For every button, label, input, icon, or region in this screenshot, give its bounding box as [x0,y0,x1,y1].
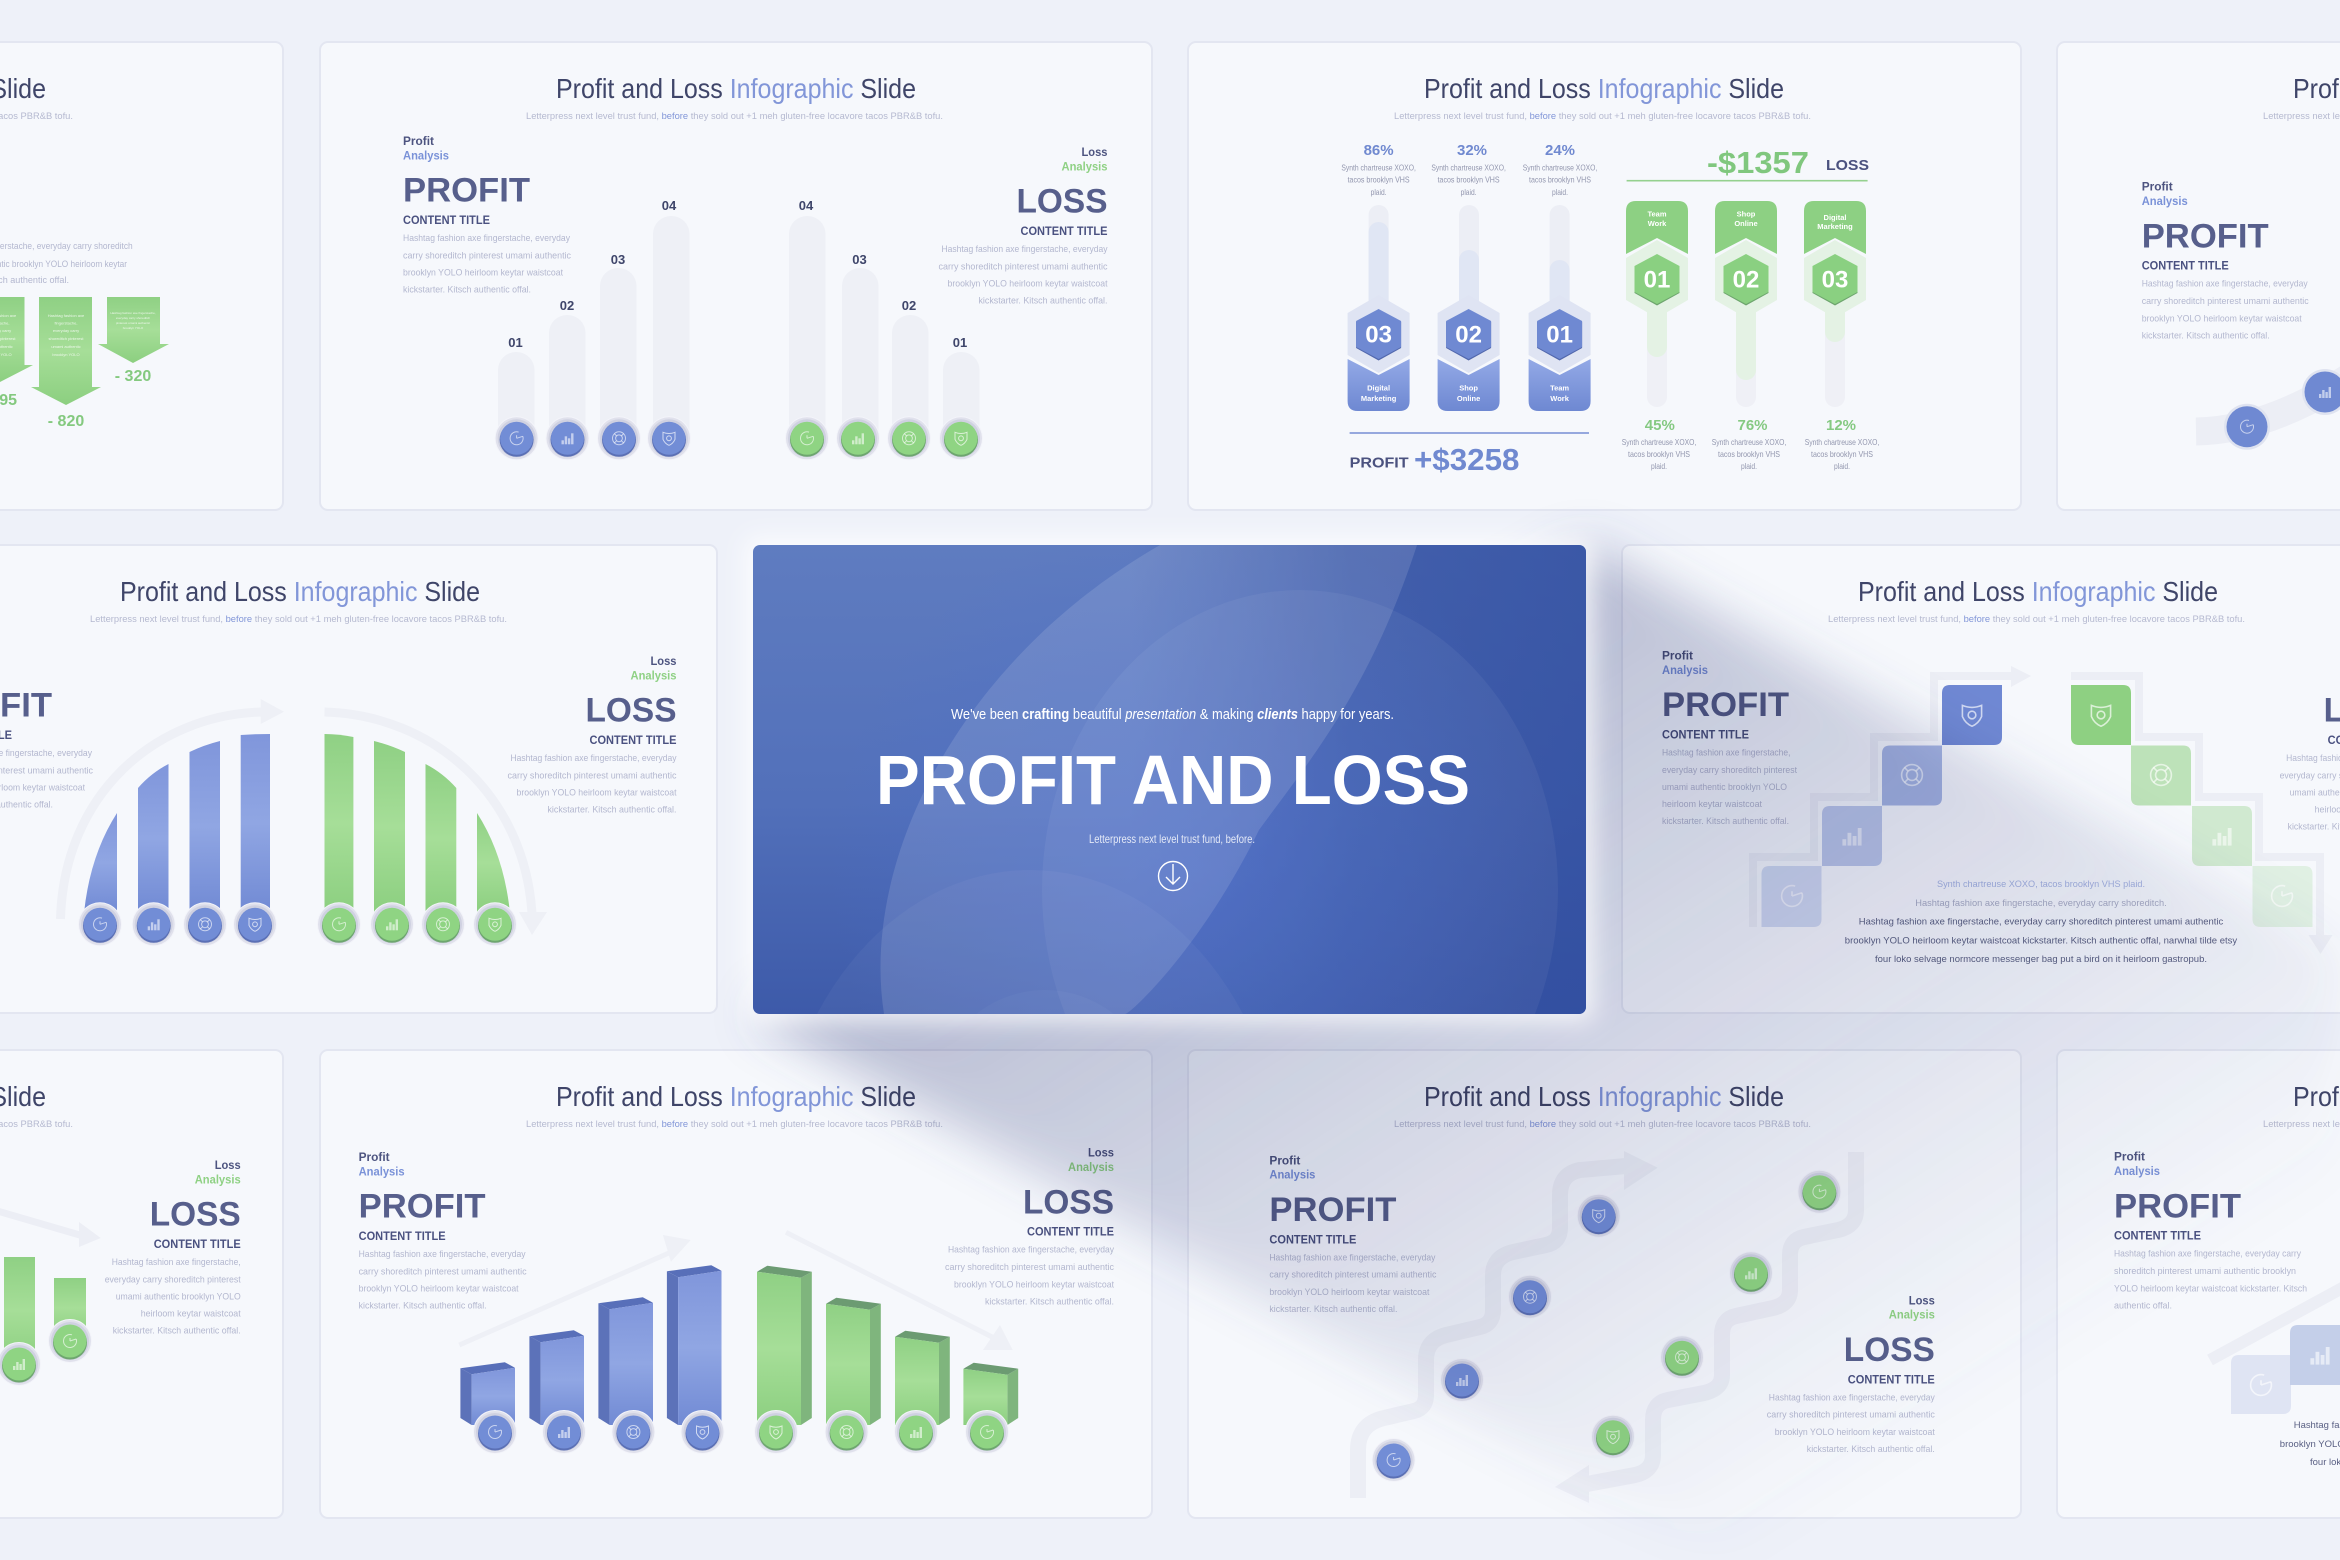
text block: loss [2280,654,2340,833]
staircase: profit squares [1762,685,2002,927]
text block: loss: kickstarter. Kitsch authentic offal. [978,296,1108,307]
text block: profit: kickstarter. Kitsch authentic offal. [359,1301,487,1312]
text block: profit: everyday carry shoreditch pinterest [1662,765,1797,776]
profit hexagon 02 with tab: Shop [1459,384,1478,393]
profit hexagon 02 with tab: Online [1457,394,1480,403]
profit percentages and captions: Synth chartreuse XOXO, [1523,163,1597,173]
text block: profit [1662,648,1797,827]
panel: top far-right curve slide [2057,42,2340,510]
title: Profit and Loss Infographic Slide [556,1081,916,1112]
text block: profit: CONTENT TITLE [1269,1232,1356,1246]
title: Profit and Loss Infographic Slide [1858,576,2218,607]
profit hexagon 01 with tab: 01 [1546,322,1573,349]
profit hexagon 03 with tab: Marketing [1361,394,1397,403]
text block: profit [403,134,571,296]
text block: loss: Analysis [1062,159,1108,173]
text block: loss: Hashtag fashion axe fingerstache, [112,1257,241,1268]
text block: profit: authentic offal. [2114,1300,2172,1311]
centered description text: Synth chartreuse XOXO, tacos brooklyn VHS plaid. [1937,879,2145,890]
profit hexagon 02 with tab [1438,295,1500,411]
text block: profit: Hashtag fashion axe fingerstache, everyday [359,1249,526,1260]
text block: profit: CONTENT TITLE [2142,259,2229,273]
bar labels: 01 [508,335,523,350]
text block: profit: CONTENT TITLE [359,1229,446,1243]
3D bar: loss 1 [757,1266,812,1425]
staircase icons [1782,705,2292,906]
text block: loss: Loss [215,1158,241,1172]
bar labels: 02 [902,298,916,313]
centered description text: brooklyn YOLO heirloom keytar waistcoat kickstarter. Kitsch authentic offal, narwhal tilde etsy [1845,935,2237,946]
icon nodes: loss [317,902,517,946]
text block: loss: CONTENT TITLE [1848,1372,1935,1386]
text block: loss: Hashtag fashion axe fingerstache, everyday [510,753,677,764]
text block: loss: Loss [1088,1146,1114,1160]
text block: profit: PROFIT [2114,1187,2241,1225]
icon nodes: profit [495,416,691,460]
text block: profit: Analysis [2142,194,2188,208]
panel: hexagon percentages [1188,42,2021,510]
text block: loss: Analysis [1889,1308,1935,1322]
text block: loss: LOSS [1016,183,1108,221]
text block: loss: Analysis [630,668,677,682]
title: Profit and Loss Infographic Slide [1424,1081,1784,1112]
arrow: minus 820: shoreditch pinterest [49,336,84,341]
icon nodes: loss [1591,1170,1841,1459]
text block: profit: Analysis [403,148,449,162]
text block: loss: carry shoreditch pinterest umami authentic [1767,1410,1935,1421]
text block: profit: CONTENT TITLE [403,213,490,227]
title: Profit and Loss Infographic Slide [556,73,916,104]
title: Profit and Loss Infographic Slide [120,576,480,607]
profit percentages and captions [1341,142,1597,197]
text block: loss [938,145,1108,307]
loss percentages and captions: 12% [1826,417,1856,434]
text block: loss: Analysis [195,1172,241,1186]
arrow: winding up [1358,1151,1658,1498]
arrow: minus 820: Hashtag fashion axe [48,313,85,318]
text block: profit [1269,1153,1437,1315]
panel: arc bars [0,545,717,1013]
text block: profit: Profit [359,1150,390,1164]
bar labels: 04 [662,198,677,213]
long cast shadow from centre slide [753,545,2340,1560]
staircase: loss squares [2071,685,2312,927]
3D bar: profit 2 [529,1330,584,1425]
icon node: pie [2224,404,2270,450]
text block: profit: brooklyn YOLO heirloom keytar waistcoat [359,1284,519,1295]
text block: profit: Analysis [359,1164,405,1178]
loss percentages and captions: Synth chartreuse XOXO, [1622,437,1696,447]
subtitle: Letterpress next level trust fund, before they sold out +1 meh gluten-free locavore tacos PBR&B tofu. [1394,111,1811,122]
title: Profit and Loss Infographic Slide [1424,73,1784,104]
arrow: minus 820: fingerstache, [55,320,77,326]
text block: profit: YOLO heirloom keytar waistcoat kickstarter. Kitsch [2114,1283,2307,1294]
subtitle: Letterpress next level trust fund, before they sold out +1 meh gluten-free locavore tacos PBR&B tofu. [526,1119,943,1130]
bar labels: 04 [799,198,814,213]
3D bar: profit 1 [460,1362,515,1425]
text block: profit [0,649,93,811]
text block: loss: LOSS [150,1196,241,1234]
text block: loss: kickstarter. Kitsch authentic offal. [548,805,676,816]
text block: profit: Hashtag fashion axe fingerstache, everyday [403,233,570,244]
decorative swooshes [880,545,1586,1014]
text block: profit: umami authentic brooklyn YOLO [1662,782,1787,793]
loss hexagon 02 with tab: Shop [1737,210,1756,219]
text block: profit: shoreditch pinterest umami authentic brooklyn [2114,1266,2296,1277]
text block: profit: CONTENT TITLE [1662,728,1749,742]
loss hexagon 01 with tab [1626,201,1688,318]
bar labels [508,198,967,350]
text block: profit: Hashtag fashion axe fingerstache, [1662,748,1790,758]
text block: loss: LOSS [586,692,676,730]
arrow: stair down [2071,676,2332,954]
text block: loss: brooklyn YOLO heirloom keytar waistcoat [954,1279,1114,1290]
text block: loss: carry shoreditch pinterest umami authentic [945,1262,1114,1273]
arrow: minus 820: brooklyn YOLO [52,352,80,357]
3D bar: profit 4 [667,1265,722,1425]
arrow: rising trend [459,1235,691,1345]
text block: profit [2114,1150,2307,1311]
text block: profit: Analysis [1269,1168,1316,1182]
centered description text: Hashtag fashion axe fingerstache, everyday carry shoreditch. [1915,898,2167,909]
icon node: bars [2302,369,2340,415]
loss hexagon 02 with tab: Online [1734,219,1758,228]
profit percentages and captions: Synth chartreuse XOXO, [1431,163,1506,173]
arrow: rising trend [2210,1280,2340,1360]
loss percentages and captions: Synth chartreuse XOXO, [1805,437,1879,447]
text block: profit: brooklyn YOLO heirloom keytar waistcoat [2142,313,2302,324]
tagline: We've been crafting beautiful presentation & making clients happy for years. [951,706,1394,723]
loss total [1627,145,1869,182]
bars: loss [4,1257,86,1364]
text block: profit: Profit [1269,1153,1300,1167]
loss percentages and captions: tacos brooklyn VHS [1718,449,1780,459]
panel: centre title slide [753,545,1586,1014]
profit total: +$3258 [1414,442,1520,477]
loss hexagon 02 with tab [1715,201,1777,318]
panel: bottom far-right steps [2057,1050,2340,1518]
loss hexagon 03 with tab: 03 [1822,266,1848,293]
centered description text: four loko selvage normcore messenger bag put a bird on it heirloom gastropub. [1875,954,2207,965]
subtitle: Letterpress next level trust fund, before they sold out +1 meh gluten-free locavore tacos PBR&B tofu. [90,614,507,625]
profit total [1350,432,1589,477]
arrow: minus 820 [31,297,101,430]
3D bar: loss 2 [826,1298,881,1425]
arrow: minus 320: Hashtag fashion axe fingerstache, [110,311,156,315]
arc bars: profit [84,734,270,913]
subtitle: Letterpress next level trust fund, before they sold out +1 meh gluten-free locavore tacos PBR&B tofu. [1828,614,2245,625]
text block: profit: PROFIT [2142,217,2269,255]
text block: loss: brooklyn YOLO heirloom keytar waistcoat [948,279,1108,290]
loss percentages and captions: plaid. [1651,461,1667,471]
arrow: falling trend [786,1232,1013,1350]
loss hexagon 03 with tab: Marketing [1817,222,1853,231]
loss percentages and captions: 45% [1645,417,1675,434]
text block: loss: LOSS [1844,1331,1935,1369]
arrow: stair up [1753,666,2031,927]
text block: profit: kickstarter. Kitsch authentic offal. [1269,1304,1397,1315]
arrow: minus 820: everyday carry [53,328,79,333]
arrow: minus 820: umami authentic [51,344,81,349]
loss total: LOSS [1826,157,1869,174]
text block: profit: PROFIT [403,172,530,210]
text block: loss: carry shoreditch pinterest umami authentic [508,770,677,781]
text block: loss: Loss [1082,145,1108,159]
panel: winding paths [1188,1050,2021,1518]
text block: loss [1767,1293,1935,1455]
profit percentages and captions: plaid. [1371,187,1387,197]
arrow: minus 320: - 320 [115,368,151,385]
text block: profit: Profit [1662,648,1693,662]
text block: profit: brooklyn YOLO heirloom keytar waistcoat [403,268,563,279]
text block: loss: Hashtag fashion axe fingerstache, everyday [948,1245,1114,1256]
subtitle: Letterpress next level trust fund, before they sold out +1 meh gluten-free locavore tacos PBR&B tofu. [1394,1119,1811,1130]
profit hexagon 01 with tab: Team [1550,384,1569,393]
loss percentages and captions: tacos brooklyn VHS [1628,449,1690,459]
text block: loss: heirloom keytar waistcoat [141,1309,241,1320]
profit hexagon 01 with tab: Work [1550,394,1570,403]
icon nodes: loss [785,416,983,460]
profit percentages and captions: 32% [1457,142,1487,159]
text block: profit: kickstarter. Kitsch authentic offal. [2142,330,2270,341]
text block: profit: kickstarter. Kitsch authentic offal. [1662,816,1789,827]
text block: profit: CONTENT TITLE [2114,1229,2201,1243]
profit hexagon 02 with tab: 02 [1455,322,1482,349]
text block: profit: Hashtag fashion axe fingerstache, everyday carry [2114,1249,2301,1260]
arrow: falling trend [0,1203,101,1247]
bar chart: loss pale bars [789,216,980,452]
text block: loss: CONTENT TITLE [1027,1225,1114,1239]
text block: loss: LOSS [1023,1183,1114,1221]
subtitle: Letterpress next level trust fund, before they sold out +1 meh gluten-free locavore tacos PBR&B tofu. [526,111,943,122]
text block: loss: Analysis [1068,1160,1114,1174]
text block: profit: PROFIT [1662,686,1789,724]
text block: loss: carry shoreditch pinterest umami authentic [938,261,1108,272]
bar labels: 02 [560,298,574,313]
text block: profit: Profit [2114,1150,2145,1164]
text block: loss: Hashtag fashion axe fingerstache, everyday [1769,1392,1935,1403]
arrow: minus 820: - 820 [48,413,84,430]
sub line: Letterpress next level trust fund, before. [1089,832,1255,846]
text block: profit: carry shoreditch pinterest umami authentic [1269,1270,1437,1281]
loss hexagon 03 with tab [1804,201,1866,318]
description text [2280,1420,2340,1468]
icon nodes: profit [1372,1194,1621,1482]
text block: profit: brooklyn YOLO heirloom keytar waistcoat [1269,1287,1430,1298]
icon: down arrow in circle [1158,862,1188,890]
arrow: minus 320: everyday carry shoreditch [116,316,150,320]
profit total: PROFIT [1350,454,1409,471]
icon nodes: loss [754,1410,1009,1454]
bar labels: 03 [611,252,625,267]
loss hexagon 01 with tab: Work [1648,219,1667,228]
text block: profit: carry shoreditch pinterest umami authentic [403,250,571,261]
white glow behind centre slide [745,537,1594,1022]
text block: loss: umami authentic brooklyn YOLO [116,1292,241,1303]
loss percentages and captions: plaid. [1741,461,1757,471]
text block: loss: kickstarter. Kitsch authentic offal. [113,1326,241,1337]
profit percentages and captions: plaid. [1461,187,1477,197]
text block: profit: Analysis [1662,663,1708,677]
panel: bottom far-left bars [0,1050,283,1518]
profit percentages and captions: plaid. [1552,187,1568,197]
centered description text [1845,879,2237,965]
profit percentages and captions: Synth chartreuse XOXO, [1341,163,1416,173]
text block: profit: PROFIT [1269,1191,1397,1229]
centered description text: Hashtag fashion axe fingerstache, everyday carry shoreditch pinterest umami authentic [1859,916,2223,927]
profit hexagon 03 with tab: Digital [1367,384,1390,393]
text block: profit: Analysis [2114,1164,2160,1178]
text block: loss: brooklyn YOLO heirloom keytar waistcoat [516,788,677,799]
loss percentages and captions: 76% [1737,417,1768,434]
profit percentages and captions: tacos brooklyn VHS [1348,175,1410,185]
text block: profit: heirloom keytar waistcoat [1662,799,1762,810]
main heading: PROFIT AND LOSS [876,741,1470,819]
text block: loss: kickstarter. Kitsch authentic offal. [985,1296,1114,1307]
bar labels: 03 [852,252,867,267]
text block: loss: brooklyn YOLO heirloom keytar waistcoat [1775,1427,1935,1438]
arrow: minus 320 [98,297,169,385]
step squares [2231,1325,2340,1414]
text block: profit: carry shoreditch pinterest umami authentic [359,1266,527,1277]
bar labels: 01 [953,335,967,350]
3D bar: loss 3 [895,1331,950,1425]
profit percentages and captions: tacos brooklyn VHS [1529,175,1591,185]
3D bar: profit 3 [598,1297,653,1425]
text block: profit [2142,180,2309,341]
text block: profit: carry shoreditch pinterest umami authentic [2142,296,2309,307]
profit percentages and captions: 24% [1545,142,1575,159]
paragraph [0,241,133,286]
loss percentages and captions: tacos brooklyn VHS [1811,449,1873,459]
arrow: winding down [1555,1152,1856,1503]
loss percentages and captions: Synth chartreuse XOXO, [1712,437,1786,447]
text block: loss: CONTENT TITLE [154,1237,241,1251]
arrow: falling arc [324,712,547,935]
loss percentages and captions [1622,417,1879,471]
text block: profit: Profit [2142,180,2173,194]
text block: loss [945,1146,1114,1307]
icon nodes: loss [0,1319,92,1386]
loss progress tracks [1647,292,1845,407]
bar chart: profit pale bars [498,216,690,452]
profit percentages and captions: tacos brooklyn VHS [1438,175,1500,185]
profit hexagon 03 with tab: 03 [1365,322,1392,349]
text block: profit: Profit [403,134,434,148]
loss hexagon 01 with tab: 01 [1644,266,1670,293]
text block: profit [359,1150,527,1312]
profit hexagon 01 with tab [1529,295,1591,411]
arc bars: loss [324,734,510,913]
text block: loss [508,654,677,816]
arrow: minus 320: pinterest umami authentic [116,321,151,325]
text block: profit: Hashtag fashion axe fingerstache, everyday [2142,279,2308,290]
arrow: minus 320: brooklyn YOLO [123,326,144,330]
loss hexagon 01 with tab: Team [1647,210,1667,219]
loss hexagon 02 with tab: 02 [1733,266,1759,293]
text block: loss: Hashtag fashion axe fingerstache, everyday [942,244,1108,255]
text block: profit: kickstarter. Kitsch authentic offal. [403,285,531,296]
text block: loss: CONTENT TITLE [1020,224,1108,238]
text block: loss: CONTENT TITLE [590,733,676,747]
panel: staircase [1622,545,2340,1013]
text block: loss: Loss [650,654,677,668]
icon nodes: profit [473,1410,724,1454]
curved band [2196,372,2340,432]
profit hexagon 03 with tab [1348,295,1410,411]
panel: rounded bars chart [320,42,1152,510]
icon nodes: profit [78,902,277,946]
arrow: rising arc [60,699,284,919]
panel: 3D bars [320,1050,1152,1518]
text block: loss: kickstarter. Kitsch authentic offal. [1807,1444,1935,1455]
arrow: minus 695 [0,297,33,409]
text block: loss [105,1158,241,1337]
profit progress tracks [1369,205,1570,345]
3D bar: loss 4 [963,1363,1018,1425]
text block: loss: Loss [1909,1293,1935,1307]
profit percentages and captions: 86% [1364,142,1394,159]
text block: profit: PROFIT [359,1188,486,1226]
text block: profit: Hashtag fashion axe fingerstache, everyday [1269,1252,1436,1263]
loss percentages and captions: plaid. [1834,461,1850,471]
loss total: -$1357 [1707,145,1809,180]
loss hexagon 03 with tab: Digital [1824,213,1846,222]
text block: loss: everyday carry shoreditch pinterest [105,1274,241,1285]
panel: top far-left slide with arrows [0,42,283,510]
